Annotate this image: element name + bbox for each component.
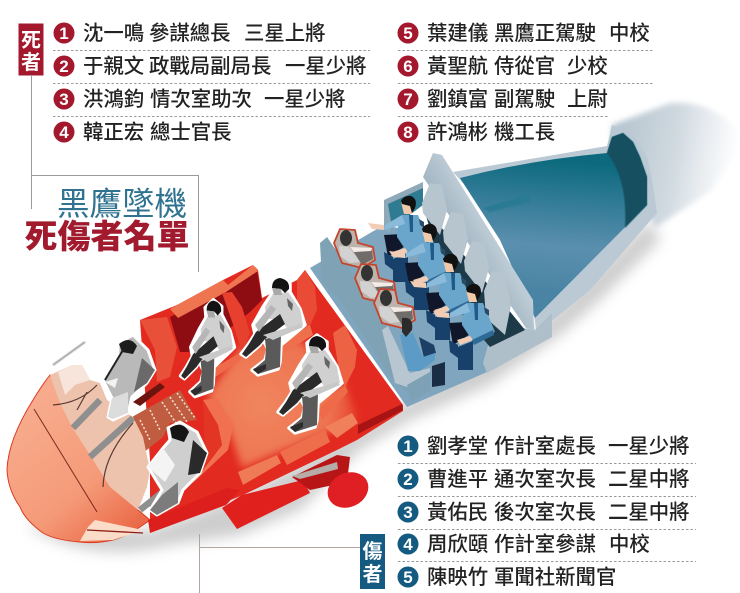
list: dead, left column: 情次室助次 [150, 88, 252, 111]
nose body [7, 375, 150, 543]
seats, rear row [422, 183, 511, 335]
list: injured: 黃佑民 [427, 501, 488, 524]
list: dead, left column: 1 [59, 24, 69, 43]
list: dead, right column: 黃聖航 [427, 55, 488, 78]
wipers [53, 385, 133, 487]
title [24, 186, 190, 255]
list: dead, right column: 中校 [609, 22, 650, 45]
list: injured [398, 435, 696, 589]
list: dead, left column: 政戰局副局長 [149, 55, 271, 78]
list: injured: 二星中將 [608, 468, 690, 491]
interior stub [483, 194, 530, 212]
list: dead, right column: 少校 [567, 55, 608, 78]
title frame line [31, 75, 199, 272]
console [132, 383, 197, 453]
list: dead, right column: 劉鎮富 [427, 88, 488, 111]
list: dead, left column: 總士官長 [150, 121, 232, 144]
list: dead, right column [398, 22, 654, 144]
cabin floor [310, 225, 520, 407]
rear wall [170, 270, 262, 352]
title: 黑鷹墜機 [57, 186, 187, 222]
list: dead, left column: 一星少將 [285, 55, 367, 78]
list: dead, left column: 三星上將 [244, 22, 326, 45]
passenger 2 [241, 277, 305, 375]
tail section [453, 103, 738, 333]
red belly [148, 488, 240, 533]
seats, front row [320, 237, 431, 402]
hull [140, 265, 403, 532]
shadow under helicopter [25, 220, 660, 552]
bulkhead [423, 153, 534, 330]
list: injured: 陳映竹 [427, 566, 488, 589]
list: injured: 5 [403, 568, 413, 587]
red cabin [140, 265, 403, 532]
cabin floor [207, 340, 358, 468]
list: injured: 劉孝堂 [427, 435, 488, 458]
tail interior [460, 133, 647, 318]
window frames [73, 400, 175, 510]
pilot seat left [140, 317, 177, 382]
list: injured: 曹進平 [427, 468, 488, 491]
list: dead, left column: 于親文 [83, 55, 144, 78]
pilot seat right [193, 398, 233, 483]
hull red stripe [358, 404, 403, 434]
top rim [170, 265, 258, 318]
officers [368, 196, 430, 282]
list: dead, right column: 6 [403, 57, 413, 76]
passenger 1 [180, 300, 235, 397]
cockpit glass [50, 365, 150, 510]
list: injured: 作計室處長 [494, 435, 596, 458]
list: dead, left column: 4 [59, 123, 69, 142]
tail hole [607, 133, 647, 228]
wheel [322, 466, 374, 514]
tail rim [453, 125, 657, 333]
list: dead, right column: 上尉 [567, 88, 608, 111]
list: dead, left column: 洪鴻鈞 [83, 88, 144, 111]
list: injured: 周欣頤 [427, 533, 488, 556]
tag: 傷者 [360, 534, 385, 589]
bottom frame line [199, 534, 360, 593]
pilot 2 [148, 422, 207, 515]
list: injured: 通次室次長 [494, 468, 596, 491]
tag: 死者 [18, 24, 44, 76]
list: injured: 2 [403, 470, 413, 489]
list: injured: 4 [403, 535, 413, 554]
list: dead, left column: 2 [59, 57, 69, 76]
list: injured: 一星少將 [608, 435, 690, 458]
left wall [384, 182, 423, 232]
skid / sponson [222, 480, 310, 529]
seat pans [210, 353, 241, 378]
list: dead, left column: 一星少將 [264, 88, 346, 111]
lower cabin wall [483, 313, 552, 373]
list: dead, right column: 機工長 [494, 121, 555, 144]
list: injured: 後次室次長 [494, 501, 596, 524]
list: dead, left column: 參謀總長 [149, 22, 231, 45]
lower window [80, 520, 143, 541]
lower rim blocks [238, 455, 281, 485]
list: dead, left column [53, 22, 370, 144]
list: injured: 3 [403, 503, 413, 522]
list: dead, right column: 侍從官 [494, 55, 555, 78]
passenger 3 [278, 335, 342, 433]
nose panel line [34, 409, 97, 512]
rear seats [222, 292, 250, 353]
list: dead, right column: 副駕駛 [494, 88, 555, 111]
injured officer in blue [400, 318, 445, 387]
canopy strip [53, 342, 85, 365]
landing gear strut [292, 455, 350, 490]
list: dead, right column: 8 [403, 123, 413, 142]
list: dead, left column: 3 [59, 90, 69, 109]
tail tube [612, 103, 738, 228]
gear detail [292, 462, 338, 479]
list: injured: 中校 [609, 533, 650, 556]
list: dead, right column: 5 [403, 24, 413, 43]
list: dead, left column: 韓正宏 [83, 121, 144, 144]
tag: 死者: 死 [21, 30, 41, 52]
pilot 1 [103, 335, 155, 420]
list: dead, right column: 黑鷹正駕駛 [494, 22, 596, 45]
glass highlight [58, 365, 90, 395]
blue cabin [310, 153, 552, 407]
list: injured: 軍聞社新聞官 [494, 566, 616, 589]
injured group [334, 229, 415, 328]
list: injured: 作計室參謀 [494, 533, 596, 556]
tag: 傷者: 者 [362, 563, 382, 586]
nose [7, 342, 240, 543]
tag: 死者: 者 [21, 51, 41, 74]
title: 死傷者名單 [24, 218, 190, 255]
list: dead, right column: 7 [403, 90, 413, 109]
list: dead, right column: 葉建儀 [427, 22, 488, 45]
list: dead, right column: 許鴻彬 [427, 121, 488, 144]
list: injured: 二星中將 [608, 501, 690, 524]
lower window line [87, 530, 143, 533]
list: injured: 1 [403, 437, 413, 456]
tag: 傷者: 傷 [362, 540, 382, 563]
list: dead, left column: 沈一鳴 [83, 22, 144, 45]
